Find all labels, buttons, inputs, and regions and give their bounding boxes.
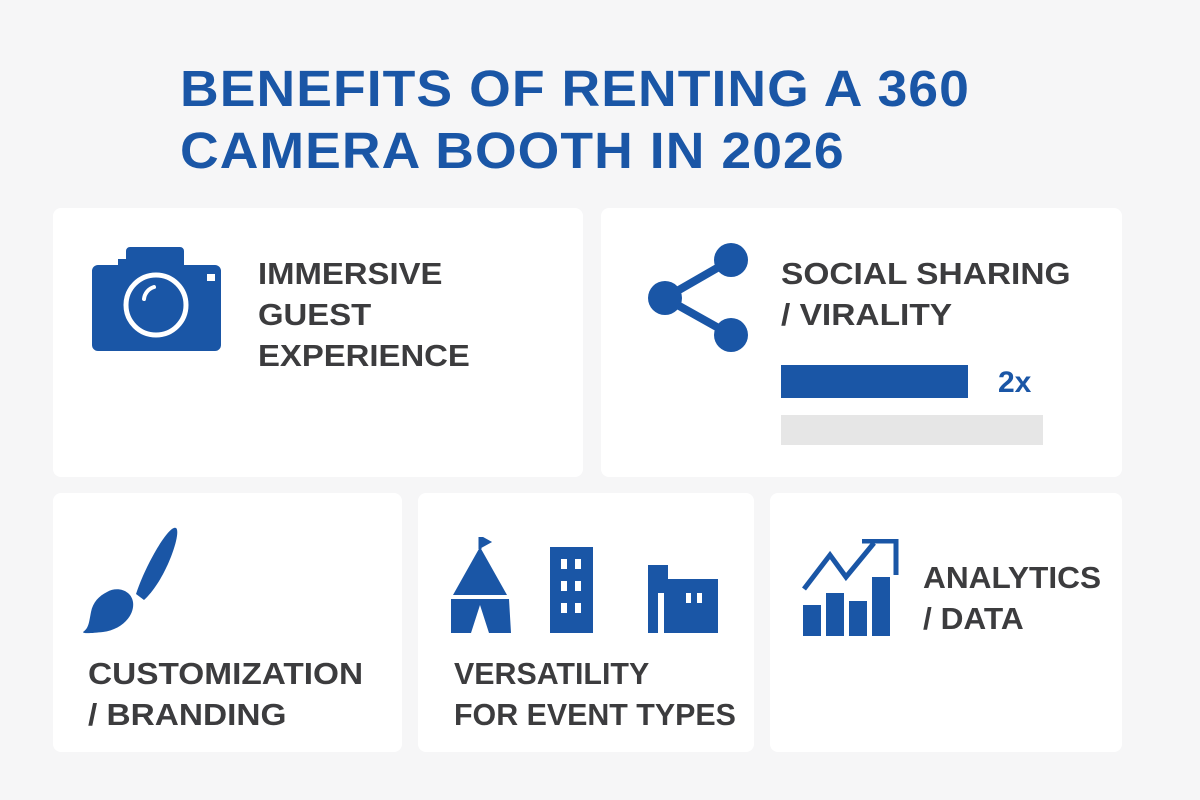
- title: CAMERA BOOTH IN 2026: [180, 122, 845, 179]
- text: versatility: VERSATILITY: [454, 656, 649, 691]
- text: social sharing: [781, 256, 1071, 332]
- text: analytics: [923, 560, 1101, 636]
- bar chart: 2x: 2x: [998, 366, 1031, 399]
- icon: share: [648, 243, 748, 352]
- text: immersive: GUEST: [258, 297, 371, 332]
- text: customization: [88, 656, 363, 732]
- panel: versatility: [418, 493, 754, 752]
- text: customization: CUSTOMIZATION: [88, 656, 363, 691]
- title: [180, 60, 970, 179]
- text: immersive: [258, 256, 470, 373]
- text: analytics: ANALYTICS: [923, 560, 1101, 595]
- panel: analytics: [770, 493, 1122, 752]
- text: immersive: IMMERSIVE: [258, 256, 442, 291]
- panel: customization: [53, 493, 402, 752]
- panel: immersive guest experience: [53, 208, 583, 477]
- bar chart: 2x: [781, 365, 1043, 445]
- icon: brush: [83, 528, 178, 634]
- icon: venues: [451, 537, 718, 633]
- text: social sharing: SOCIAL SHARING: [781, 256, 1071, 291]
- text: customization: / BRANDING: [88, 697, 286, 732]
- text: social sharing: / VIRALITY: [781, 297, 952, 332]
- title: BENEFITS OF RENTING A 360: [180, 60, 970, 117]
- text: versatility: FOR EVENT TYPES: [454, 697, 736, 732]
- text: versatility: [454, 656, 736, 732]
- icon: chart: [802, 539, 898, 636]
- text: analytics: / DATA: [923, 601, 1024, 636]
- text: immersive: EXPERIENCE: [258, 338, 470, 373]
- panel: social sharing: [601, 208, 1122, 477]
- icon: camera: [92, 247, 221, 351]
